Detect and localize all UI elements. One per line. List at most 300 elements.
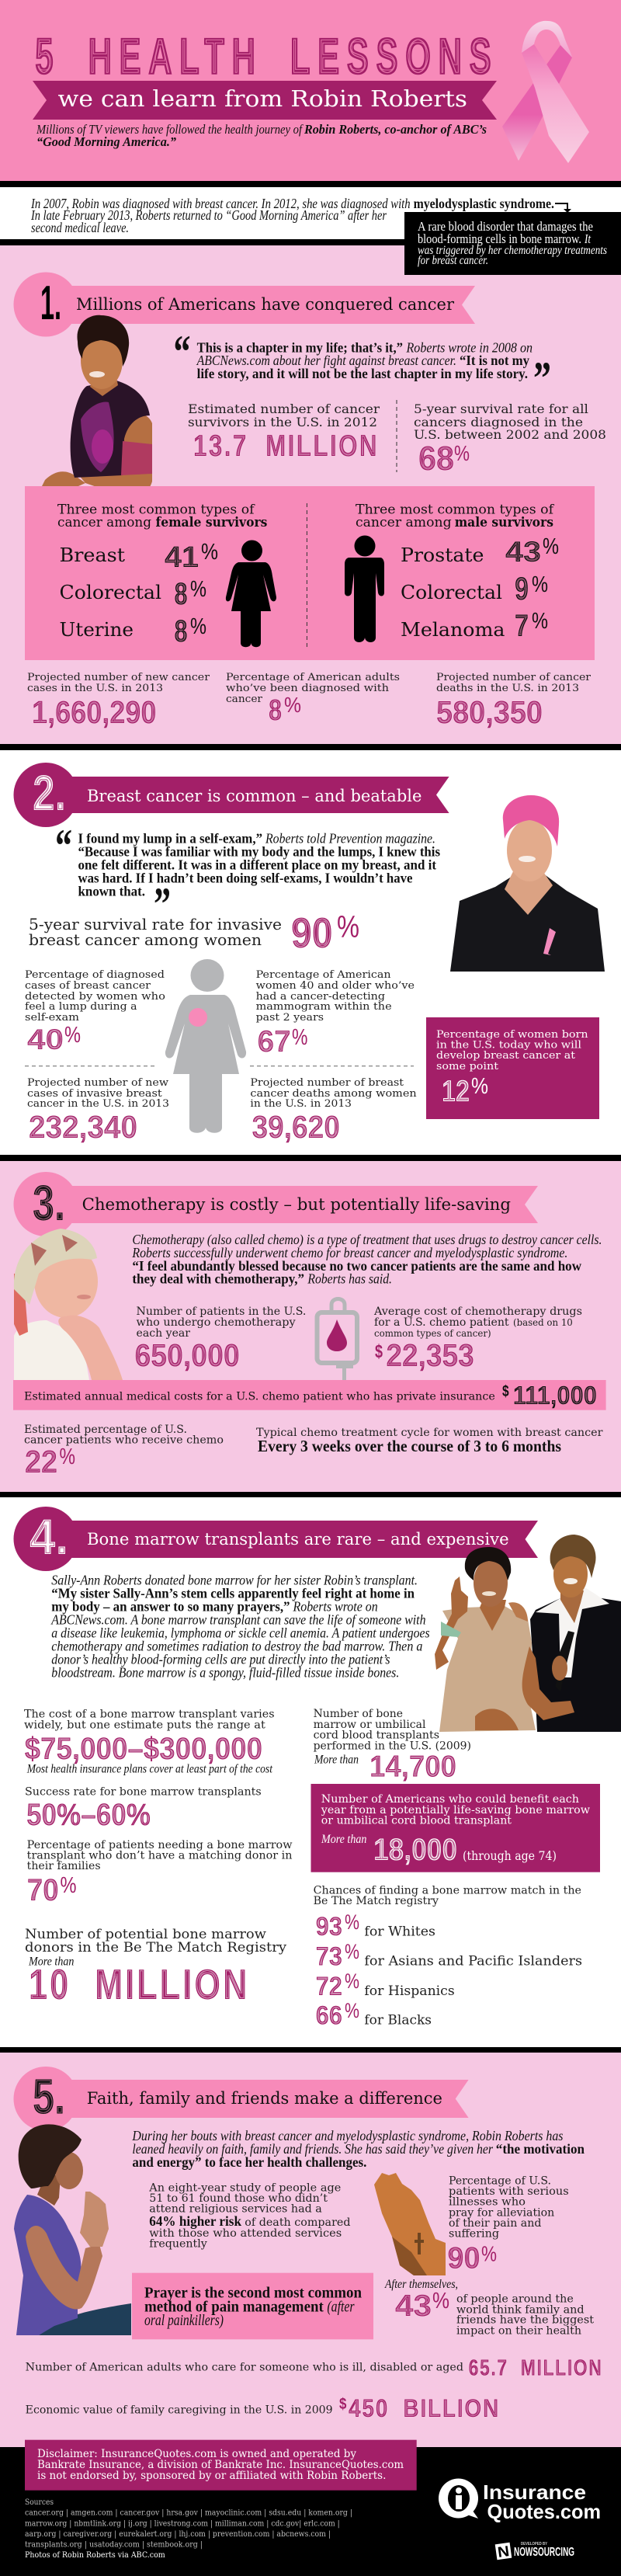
female survivors: female survivors [155, 515, 267, 530]
stat: cancer deaths: Projected number of cancer [436, 672, 592, 683]
stat: detected by women: 40 [27, 1024, 64, 1055]
female survivors: cancer among [57, 515, 151, 530]
panel: section 4 heading: 4. [29, 1509, 68, 1565]
stat: transplant cost [24, 1709, 275, 1775]
intro text: my body – an answer to so many prayers,” [51, 1599, 290, 1615]
stat: adults diagnosed: 8 [269, 694, 282, 727]
photo: woman in pink scarf [450, 795, 605, 972]
row: Hispanics: 72 [316, 1972, 342, 2001]
stat: family and friends impact: After themselves, [384, 2278, 458, 2291]
stat: chemo drug cost: 22,353 [386, 1337, 474, 1373]
panel: disclaimer: is not endorsed by, sponsored by or affiliated with Robin Roberts. [37, 2470, 386, 2482]
background note [30, 196, 554, 235]
callout: women who will develop breast cancer: develop breast cancer at [436, 1050, 576, 1062]
stat: transplants performed: marrow or umbilical [314, 1719, 425, 1731]
row: Whites: % [345, 1910, 359, 1934]
callout: prayer as pain management: (after [327, 2299, 355, 2316]
stat: mammogram: past 2 years [256, 1012, 324, 1024]
stat: new cases [27, 672, 210, 730]
quote: “It is not my [460, 353, 529, 368]
subtitle banner [33, 81, 497, 120]
intro text: Millions of TV viewers have followed the health journey of [36, 122, 304, 137]
intro text: Roberts has said. [307, 1271, 392, 1287]
stat: detected by women: feel a lump during a [25, 1001, 137, 1013]
stat: mammogram: % [292, 1025, 307, 1050]
female survivors: 8 [174, 577, 188, 611]
icon: pink ribbon [502, 21, 589, 163]
stat: cancer deaths: deaths in the U.S. in 2013 [436, 683, 579, 694]
female survivors: 8 [174, 614, 188, 648]
quote: life story, and it will not be the last chapter in my life story. [197, 366, 528, 381]
row: Hispanics: for Hispanics [364, 1983, 455, 1999]
stat: transplant cost: The cost of a bone marrow transplant varies [24, 1709, 275, 1721]
logo: NowSourcing [495, 2542, 574, 2561]
row: Hispanics [316, 1969, 455, 2001]
sources: Sources [25, 2498, 54, 2507]
quote: Roberts told Prevention magazine. [265, 831, 435, 846]
stat: economic value of caregiving: Economic value of family caregiving in the U.S. in 2009 [26, 2404, 333, 2417]
callout: Americans who could benefit [310, 1784, 600, 1872]
row: Blacks: % [345, 1999, 359, 2022]
quote [174, 326, 551, 404]
stat: new invasive cases: 232,340 [29, 1109, 137, 1145]
stat: new cases: 1,660,290 [32, 694, 157, 730]
panel: section 2 heading [14, 763, 449, 827]
panel: section 1 heading: Millions of Americans have conquered cancer [76, 295, 455, 314]
arrow [555, 203, 571, 213]
stat: match chances by group: Be The Match registry [314, 1895, 439, 1907]
intro text: “the motivation [496, 2141, 585, 2157]
male survivors: Colorectal [401, 582, 502, 603]
stat: adult caregivers: Number of American adults who care for someone who is ill, disabled or aged [26, 2362, 463, 2374]
stat: breast cancer deaths: cancer deaths among women [250, 1088, 417, 1100]
stat: patients receiving chemo [24, 1424, 224, 1479]
icon: man [345, 536, 384, 642]
stat: transplants performed: 14,700 [369, 1750, 456, 1784]
panel: section 3 heading: 3. [33, 1175, 65, 1231]
stat: patients in chemo: 650,000 [135, 1337, 240, 1373]
stat: chemo drug cost: $ [375, 1341, 383, 1362]
male survivors: cancer among [356, 515, 452, 530]
stat: adults diagnosed: Percentage of American adults [226, 672, 400, 683]
stat: new cases: Projected number of new cancer [27, 672, 210, 683]
intro text: During her bouts with breast cancer and myelodysplastic syndrome, Robin Roberts has [131, 2128, 564, 2143]
stat: 5-year survival breast cancer: 5-year survival rate for invasive [29, 915, 282, 933]
quote: was hard. If I hadn’t been doing self-exams, I wouldn’t have [78, 871, 413, 886]
stat: adults diagnosed: who’ve been diagnosed with [226, 683, 389, 694]
stat: adults diagnosed [226, 672, 400, 727]
male survivors: 43 [505, 536, 541, 568]
stat: chemo drug cost: common types of cancer) [374, 1328, 491, 1339]
sources: aarp.org | caregiver.org | eurekalert.org | lhj.com | prevention.com | abcnews.com | [25, 2530, 331, 2539]
panel: section 5 heading: Faith, family and friends make a difference [87, 2089, 442, 2108]
stat: patients receiving chemo: cancer patients who receive chemo [24, 1434, 224, 1447]
stat: religious services study: 64% higher risk [149, 2213, 241, 2229]
stat: treatment cycle: Every 3 weeks over the course of 3 to 6 months [258, 1437, 561, 1455]
intro text: bloodstream. Bone marrow is a spongy, fluid-filled tissue inside bones. [51, 1664, 399, 1680]
stat: family and friends impact: impact on their health [456, 2324, 581, 2337]
male survivors: Three most common types of [356, 502, 555, 517]
photo: woman in headscarf [14, 1229, 123, 1380]
stat: religious services study: with those who attended services [149, 2227, 342, 2240]
stat: economic value of caregiving [26, 2394, 500, 2422]
stat: success rate [25, 1786, 262, 1832]
stat: adults diagnosed: cancer [226, 694, 263, 705]
stat: patients who pray: pray for alleviation [449, 2206, 555, 2219]
stat: treatment cycle [256, 1427, 603, 1455]
logo: NowSourcing: DEVELOPED BY [521, 2542, 548, 2546]
stat: patients who pray: illnesses who [449, 2196, 526, 2209]
intro text: leaned heavily on faith, family and friends. She has said they’ve given her [132, 2141, 493, 2157]
stat: success rate: Success rate for bone marrow transplants [25, 1786, 262, 1799]
stat: breast cancer deaths [250, 1077, 417, 1145]
background note: In 2007, Robin was diagnosed with breast cancer. In 2012, she was diagnosed with [30, 196, 411, 211]
intro text: donor’s healthy blood-forming cells are put directly into the patient’s [51, 1652, 390, 1667]
panel: disclaimer: Bankrate Insurance, a division of Bankrate Inc. InsuranceQuotes.com [37, 2459, 404, 2471]
callout: definition: blood-forming cells in bone marrow. [418, 231, 581, 246]
intro text: and energy” to face her health challenges. [132, 2154, 366, 2170]
female survivors: % [201, 540, 218, 565]
stat: new invasive cases: Projected number of new [27, 1077, 169, 1089]
row: Blacks [316, 1999, 432, 2031]
stat: mammogram: mammogram within the [256, 1001, 392, 1013]
stat: new invasive cases [27, 1077, 169, 1145]
stat: mammogram: Percentage of American [256, 969, 391, 981]
stat: cancer deaths [436, 672, 592, 730]
stat: chemo drug cost: for a U.S. chemo patient [374, 1316, 509, 1329]
stat: transplants performed [314, 1708, 471, 1784]
stat: match chances by group [314, 1884, 582, 2031]
stat: family and friends impact: 43 [395, 2289, 432, 2323]
panel: section 5 heading [14, 2067, 469, 2131]
logo: InsuranceQuotes.com [439, 2479, 601, 2523]
icon: woman [226, 541, 276, 647]
intro text [50, 1573, 430, 1680]
callout: prayer as pain management: oral painkillers) [144, 2312, 224, 2329]
intro text: ABCNews.com. A bone marrow transplant can save the life of someone with [50, 1612, 426, 1628]
male survivors: % [532, 609, 548, 634]
stat: chemo drug cost: (based on 10 [513, 1317, 573, 1328]
intro text: Sally-Ann Roberts donated bone marrow for her sister Robin’s transplant. [51, 1573, 418, 1588]
stat: adults diagnosed: % [284, 693, 301, 717]
callout: Americans who could benefit: (through age 74) [463, 1849, 557, 1863]
row: Whites [316, 1910, 435, 1942]
quote: ABCNews.com about her fight against breast cancer. [196, 353, 456, 368]
bar: annual medical costs [13, 1380, 606, 1410]
callout: women who will develop breast cancer: some point [436, 1061, 499, 1072]
stat: patients in chemo: Number of patients in the U.S. [137, 1305, 306, 1318]
row: Asians and Pacific Islanders: 73 [316, 1942, 342, 1972]
logo: NowSourcing: NOWSOURCING [514, 2546, 574, 2559]
stat: no matching donor [27, 1839, 293, 1907]
callout: women who will develop breast cancer: in the U.S. today who will [436, 1039, 581, 1051]
stat: no matching donor: their families [27, 1860, 101, 1872]
quote: Roberts wrote in 2008 on [406, 339, 533, 355]
intro text: Roberts wrote on [293, 1599, 378, 1615]
stat: potential donors [25, 1927, 286, 2008]
stat: family and friends impact: of people around the [456, 2293, 574, 2306]
stat: survival rate: 68 [418, 440, 454, 478]
stat: detected by women: detected by women who [25, 991, 165, 1003]
male survivors: % [532, 572, 548, 597]
stat: survival rate: U.S. between 2002 and 2008 [414, 427, 606, 442]
stat: adult caregivers [26, 2355, 602, 2380]
row: Blacks: for Blacks [364, 2013, 432, 2028]
bar: annual medical costs: 111,000 [513, 1381, 597, 1410]
stat: 5-year survival breast cancer: 90 [291, 909, 333, 957]
stat: detected by women: cases of breast cancer [25, 980, 151, 992]
stat: transplant cost: Most health insurance plans cover at least part of the cost [26, 1762, 272, 1775]
stat: religious services study: 51 to 61 found those who didn’t [149, 2192, 328, 2205]
stat: transplant cost: $75,000–$300,000 [25, 1732, 262, 1766]
intro text: chemotherapy and sometimes radiation to destroy the bad marrow. Then a [51, 1639, 423, 1654]
icon: praying hands with rosary [374, 2173, 446, 2275]
bar: annual medical costs: Estimated annual medical costs for a U.S. chemo patient who has private insurance [24, 1391, 495, 1403]
panel: section 4 heading [14, 1507, 538, 1571]
sources: Photos of Robin Roberts via ABC.com [25, 2551, 165, 2560]
male survivors: % [543, 534, 559, 559]
stat: breast cancer deaths: Projected number of breast [250, 1077, 404, 1089]
stat: patients receiving chemo: % [59, 1444, 75, 1469]
stat: mammogram: 67 [258, 1025, 291, 1059]
stat: family and friends impact: world think family and [456, 2303, 585, 2316]
logo: InsuranceQuotes.com: Quotes.com [487, 2500, 601, 2523]
stat: transplant cost: widely, but one estimate puts the range at [24, 1719, 265, 1731]
intro text: “Good Morning America.” [36, 134, 176, 149]
stat: transplants performed: Number of bone [314, 1708, 403, 1720]
stat: detected by women: self-exam [25, 1012, 79, 1024]
stat: family and friends impact: friends have the biggest [456, 2314, 595, 2327]
panel: section 2 heading: Breast cancer is common – and beatable [87, 787, 422, 805]
stat: religious services study [148, 2181, 351, 2251]
stat: 5-year survival breast cancer: % [337, 910, 359, 944]
stat: no matching donor: Percentage of patients needing a bone marrow [27, 1839, 293, 1851]
panel: most common cancers [25, 486, 595, 660]
stat: patients who pray [447, 2174, 569, 2275]
callout: prayer as pain management: method of pain management [144, 2299, 324, 2316]
intro text: “I feel abundantly blessed because no two cancer patients are the same and how [132, 1258, 581, 1274]
row: Asians and Pacific Islanders: % [345, 1940, 359, 1963]
stat: detected by women: % [64, 1023, 81, 1048]
female survivors: % [190, 614, 206, 639]
quote: ” [533, 353, 551, 404]
callout: women who will develop breast cancer: 12 [442, 1075, 470, 1108]
stat: religious services study: attend religious services had a [149, 2203, 322, 2216]
stat: cancer survivors: Estimated number of cancer [188, 402, 380, 416]
stat: patients who pray: suffering [449, 2228, 499, 2241]
stat: 5-year survival breast cancer: breast cancer among women [29, 930, 262, 949]
callout: Americans who could benefit: year from a potentially life-saving bone marrow [321, 1804, 590, 1816]
callout: Americans who could benefit: Number of Americans who could benefit each [321, 1793, 579, 1806]
panel: section 4 heading: Bone marrow transplants are rare – and expensive [87, 1530, 509, 1549]
row: Hispanics: % [345, 1969, 359, 1993]
male survivors: 7 [515, 609, 529, 643]
quote: “ [174, 326, 191, 377]
row: Blacks: 66 [316, 2001, 342, 2031]
quote: one felt different. It was in a different place on my breast, and it [78, 857, 436, 873]
quote: I found my lump in a self-exam,” [78, 831, 262, 846]
stat: cancer survivors [188, 402, 380, 463]
panel: disclaimer: Disclaimer: InsuranceQuotes.com is owned and operated by [37, 2448, 356, 2460]
stat: chemo drug cost: Average cost of chemotherapy drugs [373, 1305, 582, 1318]
panel: section 1 heading: 1. [40, 276, 61, 330]
stat: breast cancer deaths: in the U.S. in 2013 [250, 1098, 352, 1110]
stat: patients receiving chemo: 22 [25, 1444, 57, 1479]
photo: Robin Roberts [40, 315, 152, 496]
panel: section 3 heading [14, 1172, 538, 1236]
stat: no matching donor: 70 [27, 1873, 59, 1907]
stat: patients who pray: of their pain and [449, 2217, 542, 2230]
stat: mammogram: had a cancer-detecting [256, 991, 386, 1003]
stat: cancer survivors: 13.7 MILLION [193, 429, 379, 463]
intro text: they deal with chemotherapy,” [132, 1271, 304, 1287]
panel: section 5 heading: 5. [33, 2069, 65, 2125]
stat: economic value of caregiving: 450 BILLION [349, 2394, 500, 2422]
callout: Americans who could benefit: or umbilical cord blood transplant [321, 1814, 512, 1827]
quote: “ [55, 820, 72, 871]
stat: mammogram: women 40 and older who’ve [256, 980, 415, 992]
callout: women who will develop breast cancer: Percentage of women born [436, 1029, 588, 1041]
photo: Robin and Sally-Ann Roberts [435, 1535, 621, 1732]
stat: mammogram [256, 969, 415, 1059]
icon: grey woman figure [165, 959, 246, 1133]
stat: detected by women [25, 969, 165, 1055]
callout: prayer as pain management [132, 2273, 373, 2339]
quote: “Because I was familiar with my body and the lumps, I knew this [78, 844, 440, 860]
photo: woman praying [14, 2124, 131, 2335]
row: Whites: for Whites [364, 1924, 435, 1939]
male survivors: Prostate [401, 544, 484, 566]
stat: patients who pray: Percentage of U.S. [449, 2174, 551, 2187]
quote: known that. [78, 884, 145, 899]
female survivors: Breast [59, 544, 125, 566]
background note: myelodysplastic syndrome. [414, 196, 554, 211]
sources [25, 2498, 352, 2560]
stat: potential donors: More than [28, 1955, 74, 1969]
callout: definition: A rare blood disorder that damages the [418, 219, 593, 234]
stat: religious services study: frequently [149, 2238, 207, 2251]
icon: IV bag [317, 1298, 357, 1380]
callout: prayer as pain management: Prayer is the second most common [144, 2284, 362, 2301]
panel: section 1 heading [14, 272, 475, 337]
stat: success rate: 50%–60% [26, 1798, 151, 1832]
sources: cancer.org | amgen.com | cancer.gov | hrsa.gov | mayoclinic.com | sdsu.edu | komen.org | [25, 2509, 352, 2518]
stat: no matching donor: transplant who don’t have a matching donor in [27, 1850, 293, 1862]
quote [55, 820, 440, 930]
stat: match chances by group: Chances of finding a bone marrow match in the [314, 1884, 581, 1896]
callout: Americans who could benefit: 18,000 [373, 1833, 457, 1867]
stat: religious services study: An eight-year study of people age [148, 2181, 341, 2194]
stat: new cases: cases in the U.S. in 2013 [27, 683, 163, 694]
female survivors [57, 502, 267, 648]
male survivors: male survivors [455, 515, 553, 530]
stat: patients who pray: patients with serious [449, 2185, 569, 2198]
male survivors: Melanoma [401, 619, 505, 641]
stat: survival rate: 5-year survival rate for all [414, 402, 588, 416]
callout: women who will develop breast cancer: % [471, 1074, 488, 1099]
stat: patients in chemo: each year [137, 1327, 191, 1340]
stat: economic value of caregiving: $ [339, 2396, 346, 2413]
female survivors: 41 [165, 541, 199, 574]
stat: transplants performed: More than [314, 1754, 359, 1767]
quote: This is a chapter in my life; that’s it,” [197, 339, 403, 355]
row: Asians and Pacific Islanders: for Asians and Pacific Islanders [364, 1954, 582, 1969]
bar: annual medical costs: $ [502, 1383, 509, 1400]
intro text: “My sister Sally-Ann’s stem cells apparently feel right at home in [51, 1586, 415, 1601]
stat: family and friends impact [384, 2278, 595, 2337]
stat: breast cancer deaths: 39,620 [252, 1109, 340, 1145]
stat: survival rate [414, 402, 606, 478]
panel: section 3 heading: Chemotherapy is costly – but potentially life-saving [82, 1195, 511, 1214]
stat: patients receiving chemo: Estimated percentage of U.S. [24, 1424, 187, 1436]
stat: potential donors: donors in the Be The Match Registry [25, 1940, 286, 1955]
stat: transplants performed: cord blood transplants [314, 1730, 439, 1742]
male survivors [356, 502, 559, 643]
stat: potential donors: 10 MILLION [29, 1960, 249, 2008]
intro text [131, 2128, 585, 2170]
stat: family and friends impact: % [432, 2289, 449, 2314]
stat: chemo drug cost [373, 1305, 582, 1373]
intro text: a disease like leukemia, lymphoma or sickle cell anemia. A patient undergoes [51, 1625, 430, 1641]
intro text: Robin Roberts, co-anchor of ABC’s [304, 122, 487, 137]
female survivors: Colorectal [59, 582, 161, 603]
panel: disclaimer [25, 2440, 417, 2491]
stat: religious services study: of death compared [245, 2216, 351, 2229]
stat: 5-year survival breast cancer [29, 909, 359, 957]
stat: survival rate: cancers diagnosed in the [414, 415, 583, 429]
stat: patients in chemo: who undergo chemotherapy [137, 1316, 296, 1329]
stat: treatment cycle: Typical chemo treatment cycle for women with breast cancer [256, 1427, 603, 1439]
panel: section 2 heading: 2. [33, 765, 66, 821]
sources: transplants.org | usatoday.com | stembook.org | [25, 2541, 203, 2550]
male survivors: 9 [515, 570, 529, 607]
stat: cancer deaths: 580,350 [436, 694, 543, 730]
row: Whites: 93 [316, 1912, 342, 1942]
stat: patients in chemo [135, 1305, 306, 1373]
header background [0, 0, 621, 181]
callout: women who will develop breast cancer [426, 1017, 599, 1119]
callout: Americans who could benefit: More than [321, 1833, 366, 1846]
callout: definition: It [584, 231, 592, 246]
intro text: Roberts successfully underwent chemo for breast cancer and myelodysplastic syndrome. [131, 1245, 567, 1260]
subtitle banner: we can learn from Robin Roberts [57, 85, 467, 112]
logo: NowSourcing: N [497, 2543, 511, 2561]
logo: InsuranceQuotes.com: Insurance [483, 2480, 586, 2504]
stat: no matching donor: % [61, 1873, 76, 1898]
female survivors: Three most common types of [57, 502, 255, 517]
callout: definition [404, 212, 621, 275]
intro text [36, 122, 487, 149]
stat: patients who pray: % [481, 2242, 497, 2266]
callout: definition: for breast cancer. [418, 254, 488, 267]
stat: detected by women: Percentage of diagnosed [25, 969, 165, 981]
female survivors: % [190, 577, 206, 602]
stat: new invasive cases: cases of invasive breast [27, 1088, 162, 1100]
stat: new invasive cases: cancer in the U.S. in 2013 [27, 1098, 169, 1110]
row: Asians and Pacific Islanders [316, 1940, 582, 1972]
female survivors: Uterine [59, 619, 134, 641]
intro text [131, 1232, 602, 1287]
stat: patients who pray: 90 [447, 2242, 480, 2275]
stat: potential donors: Number of potential bone marrow [25, 1927, 266, 1942]
background note: In late February 2013, Roberts returned to “Good Morning America” after her [30, 207, 387, 223]
quote: ” [154, 878, 171, 930]
sources: marrow.org | nbmtlink.org | ij.org | livestrong.com | milliman.com | cdc.gov| erlc.com | [25, 2519, 340, 2528]
background note: second medical leave. [31, 220, 129, 235]
stat: transplants performed: performed in the U.S. (2009) [314, 1740, 471, 1752]
stat: survival rate: % [454, 441, 470, 465]
stat: cancer survivors: survivors in the U.S. in 2012 [188, 415, 377, 429]
